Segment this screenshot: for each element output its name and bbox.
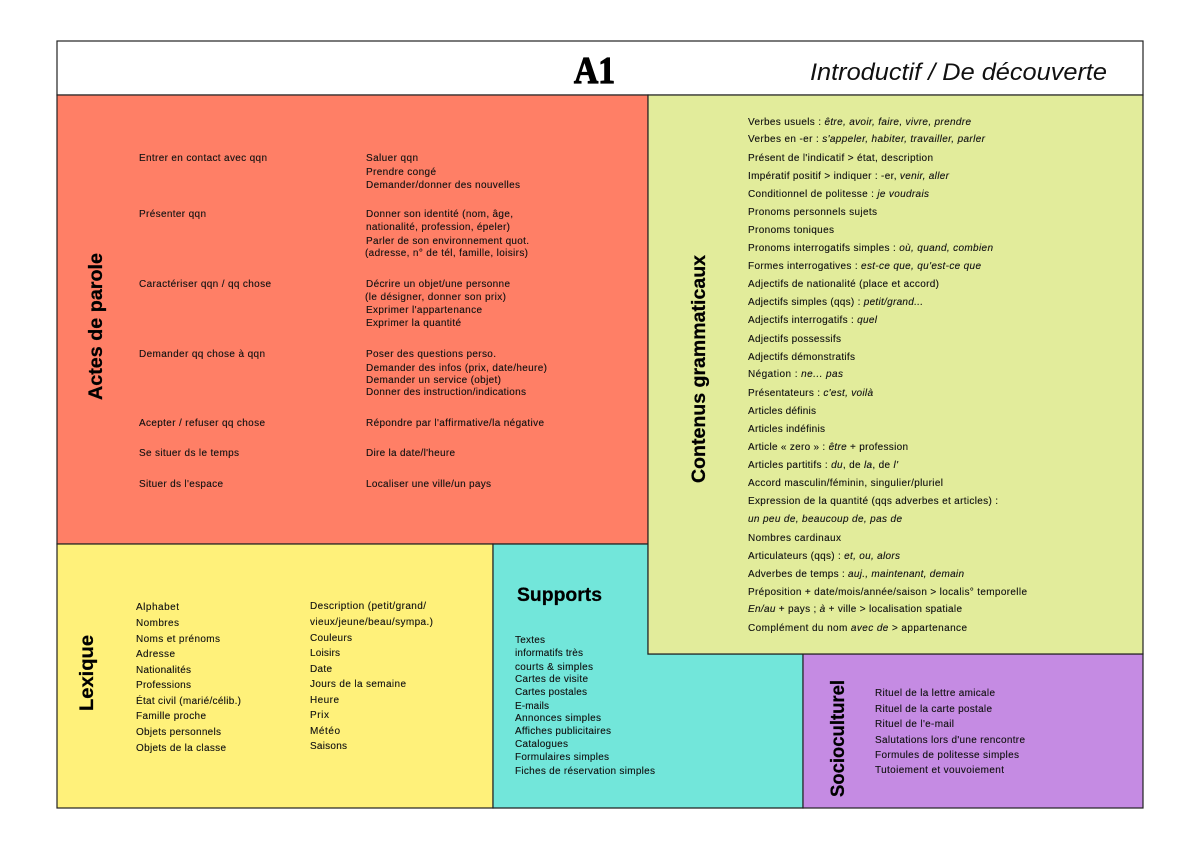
text block: actes, right column: Donner son identité (nom, âge,: [366, 209, 513, 220]
text block: lexique, right column: [310, 601, 433, 752]
text block: actes, right column: (adresse, n° de tél, famille, loisirs): [365, 248, 528, 259]
text block: actes, right column: Parler de son environnement quot.: [366, 236, 529, 247]
text block: grammar list: Adjectifs simples (qqs) : petit/grand...: [748, 297, 923, 308]
text block: actes, left column: Présenter qqn: [139, 209, 206, 220]
text block: grammar list: Présent de l'indicatif > état, description: [748, 153, 933, 164]
text block: lexique, right column: Date: [310, 664, 332, 675]
text block: grammar list: Articles définis: [748, 406, 816, 417]
panel: Contenus grammaticaux: [648, 95, 1143, 654]
text block: socioculturel list: [875, 688, 1025, 776]
text block: actes, right column: Donner des instruction/indications: [366, 387, 526, 398]
text block: actes, left column: Demander qq chose à qqn: [139, 349, 265, 360]
text block: lexique, left column: Nombres: [136, 618, 179, 629]
text block: lexique, right column: Heure: [310, 695, 339, 706]
text block: actes, right column: Exprimer l'appartenance: [366, 305, 482, 316]
text block: grammar list: Articles partitifs : du, de la, de l': [748, 460, 899, 471]
text block: actes, right column: Prendre congé: [366, 167, 436, 178]
text block: actes, right column: Demander/donner des nouvelles: [366, 180, 520, 191]
text block: supports list: Catalogues: [515, 739, 568, 750]
text block: actes, right column: [365, 153, 547, 490]
text block: grammar list: Accord masculin/féminin, singulier/pluriel: [748, 478, 943, 489]
text block: grammar list: Verbes usuels : être, avoir, faire, vivre, prendre: [748, 117, 971, 128]
text block: actes, right column: Dire la date/l'heure: [366, 448, 455, 459]
text block: grammar list: Impératif positif > indiquer : -er, venir, aller: [748, 171, 950, 182]
text block: actes, right column: Localiser une ville/un pays: [366, 479, 491, 490]
text block: actes, right column: Saluer qqn: [366, 153, 418, 164]
text block: grammar list: Nombres cardinaux: [748, 533, 841, 544]
text block: grammar list: Pronoms interrogatifs simples : où, quand, combien: [748, 243, 993, 254]
text block: lexique, left column: Adresse: [136, 649, 175, 660]
text block: supports list: Formulaires simples: [515, 752, 609, 763]
text block: socioculturel list: Rituel de la carte postale: [875, 704, 992, 715]
text block: grammar list: Articles indéfinis: [748, 424, 825, 435]
text block: grammar list: Négation : ne... pas: [748, 369, 843, 380]
text block: lexique, left column: Objets personnels: [136, 727, 221, 738]
text block: lexique, left column: Nationalités: [136, 665, 191, 676]
text block: grammar list: Adjectifs démonstratifs: [748, 352, 855, 363]
text block: grammar list: [748, 117, 1027, 634]
text block: supports list: informatifs très: [515, 648, 583, 659]
text block: lexique, right column: Jours de la semaine: [310, 679, 406, 690]
text block: lexique, left column: Noms et prénoms: [136, 634, 220, 645]
text block: grammar list: Adjectifs de nationalité (place et accord): [748, 279, 939, 290]
subtitle: Introductif / De découverte: [810, 59, 1107, 86]
text block: actes, left column: Acepter / refuser qq chose: [139, 418, 265, 429]
text block: grammar list: Présentateurs : c'est, voilà: [748, 388, 873, 399]
heading: Contenus grammaticaux: Contenus grammaticaux: [688, 255, 710, 483]
text block: grammar list: Préposition + date/mois/année/saison > localis° temporelle: [748, 587, 1027, 598]
panel: Supports: [493, 544, 803, 808]
heading: Socioculturel: Socioculturel: [827, 680, 849, 797]
text block: lexique, left column: [136, 602, 241, 754]
text block: supports list: Cartes postales: [515, 687, 587, 698]
heading: Lexique: Lexique: [76, 635, 98, 711]
text block: socioculturel list: Formules de politesse simples: [875, 750, 1019, 761]
text block: lexique, right column: Saisons: [310, 741, 347, 752]
text block: lexique, left column: Objets de la classe: [136, 743, 226, 754]
text block: grammar list: Expression de la quantité (qqs adverbes et articles) :: [748, 496, 998, 507]
text block: grammar list: Adjectifs interrogatifs : quel: [748, 315, 878, 326]
text block: lexique, right column: vieux/jeune/beau/sympa.): [310, 617, 433, 628]
text block: supports list: Cartes de visite: [515, 674, 588, 685]
text block: grammar list: Adverbes de temps : auj., maintenant, demain: [748, 569, 964, 580]
text block: grammar list: Complément du nom avec de > appartenance: [748, 623, 967, 634]
text block: socioculturel list: Rituel de la lettre amicale: [875, 688, 995, 699]
text block: grammar list: Article « zero » : être + profession: [748, 442, 908, 453]
text block: supports list: Annonces simples: [515, 713, 601, 724]
text block: lexique, left column: Famille proche: [136, 711, 206, 722]
text block: actes, left column: Entrer en contact avec qqn: [139, 153, 267, 164]
text block: grammar list: Adjectifs possessifs: [748, 334, 841, 345]
text block: supports list: Affiches publicitaires: [515, 726, 611, 737]
text block: actes, right column: Répondre par l'affirmative/la négative: [366, 418, 544, 429]
text block: actes, right column: Poser des questions perso.: [366, 349, 496, 360]
text block: supports list: E-mails: [515, 701, 549, 712]
header band: [57, 41, 1143, 95]
text block: grammar list: Formes interrogatives : est-ce que, qu'est-ce que: [748, 261, 981, 272]
text block: supports list: [515, 635, 655, 777]
text block: grammar list: Articulateurs (qqs) : et, ou, alors: [748, 551, 900, 562]
text block: actes, right column: Demander des infos (prix, date/heure): [366, 363, 547, 374]
text block: actes, left column: [139, 153, 271, 490]
panel: Actes de parole: [57, 95, 648, 544]
panel: Socioculturel: [803, 654, 1143, 808]
text block: socioculturel list: Tutoiement et vouvoiement: [875, 765, 1004, 776]
text block: socioculturel list: Salutations lors d'une rencontre: [875, 735, 1025, 746]
text block: actes, right column: Demander un service (objet): [366, 375, 501, 386]
text block: actes, right column: (le désigner, donner son prix): [365, 292, 506, 303]
panel: Lexique: [57, 544, 493, 808]
text block: lexique, left column: État civil (marié/célib.): [136, 694, 241, 707]
text block: grammar list: Verbes en -er : s'appeler, habiter, travailler, parler: [748, 134, 986, 145]
text block: lexique, left column: Alphabet: [136, 602, 179, 613]
text block: actes, left column: Situer ds l'espace: [139, 479, 223, 490]
text block: actes, right column: nationalité, profession, épeler): [366, 222, 510, 233]
text block: actes, right column: Décrire un objet/une personne: [366, 279, 510, 290]
heading: Supports: Supports: [517, 584, 602, 606]
text block: grammar list: Pronoms personnels sujets: [748, 207, 877, 218]
text block: lexique, right column: Loisirs: [310, 648, 340, 659]
text block: supports list: Fiches de réservation simples: [515, 766, 655, 777]
text block: socioculturel list: Rituel de l'e-mail: [875, 719, 954, 730]
text block: grammar list: Conditionnel de politesse : je voudrais: [748, 189, 929, 200]
text block: lexique, right column: Couleurs: [310, 633, 352, 644]
text block: lexique, right column: Description (petit/grand/: [310, 601, 426, 612]
heading: Actes de parole: Actes de parole: [85, 253, 107, 400]
title: A1: A1: [574, 50, 615, 92]
text block: actes, left column: Caractériser qqn / qq chose: [139, 279, 271, 290]
text block: actes, left column: Se situer ds le temps: [139, 448, 239, 459]
text block: supports list: Textes: [515, 635, 545, 646]
text block: supports list: courts & simples: [515, 662, 593, 673]
text block: lexique, right column: Météo: [310, 726, 340, 737]
text block: grammar list: Pronoms toniques: [748, 225, 834, 236]
text block: grammar list: En/au + pays ; à + ville > localisation spatiale: [748, 604, 962, 615]
text block: lexique, right column: Prix: [310, 710, 329, 721]
text block: grammar list: un peu de, beaucoup de, pas de: [748, 514, 902, 525]
text block: actes, right column: Exprimer la quantité: [366, 318, 461, 329]
text block: lexique, left column: Professions: [136, 680, 191, 691]
